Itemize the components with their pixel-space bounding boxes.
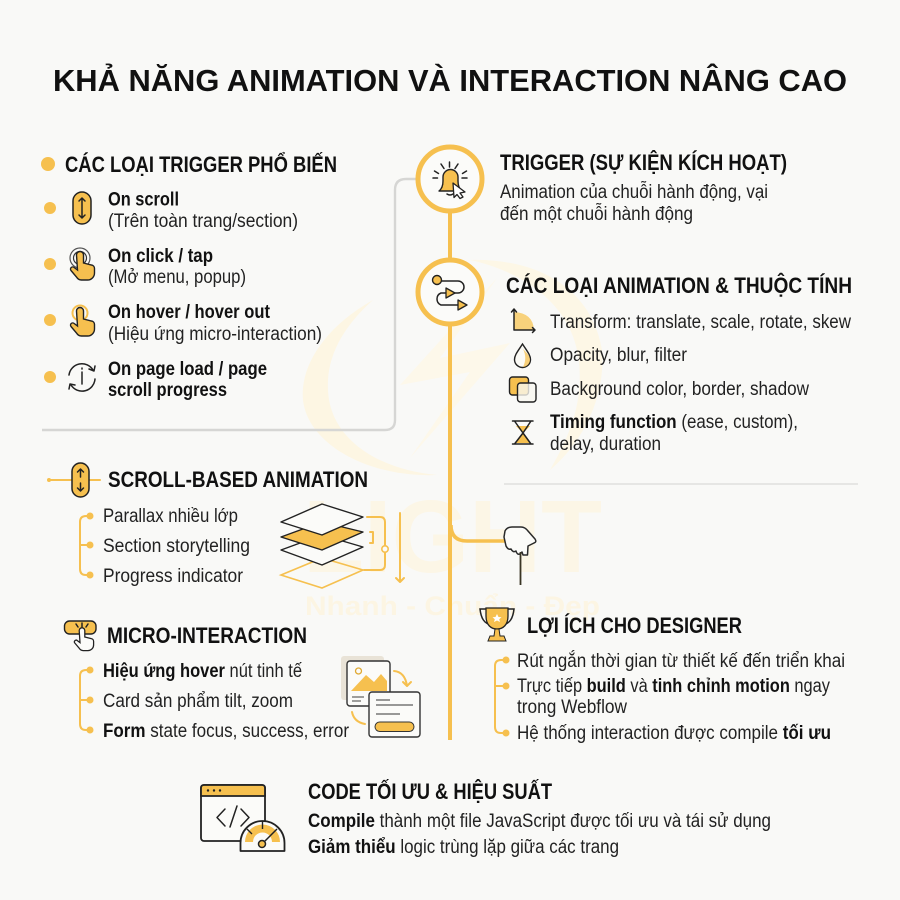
item: opacity: [514, 344, 688, 368]
icon: animation path: [418, 260, 482, 324]
panel: scroll-based animation: [47, 463, 404, 588]
heading: animation types: CÁC LOẠI ANIMATION & THUỘC TÍNH: [506, 273, 852, 298]
heading: benefits: LỢI ÍCH CHO DESIGNER: [527, 613, 742, 638]
list: benefits: Hệ thống interaction được compile tối ưu: [517, 723, 831, 744]
item: on scroll: On scroll: [108, 190, 179, 210]
item: on scroll: [44, 190, 298, 232]
watermark: LIGHT logo: Nhanh - Chuẩn - Đẹp: [305, 591, 600, 621]
item: on page load: On page load / page: [108, 359, 267, 380]
title: KHẢ NĂNG ANIMATION VÀ INTERACTION NÂNG CAO: [53, 62, 847, 98]
icon: pointing hand: [504, 527, 536, 585]
heading: trigger: TRIGGER (SỰ KIỆN KÍCH HOẠT): [500, 150, 787, 175]
heading: code optimization: CODE TỐI ƯU & HIỆU SUẤT: [308, 778, 552, 804]
text: reduce duplication: Giảm thiểu logic trùng lặp giữa các trang: [308, 837, 619, 858]
list: benefits: Trực tiếp build và tinh chỉnh motion ngay: [517, 676, 830, 697]
icon: code window with gauge: [201, 785, 284, 851]
panel: benefits for designers: [480, 608, 845, 744]
item: background: Background color, border, shadow: [550, 379, 809, 400]
item: on click: On click / tap: [108, 246, 213, 267]
divider: [504, 483, 858, 485]
list: micro-interaction items: [80, 661, 350, 742]
list: micro-interaction items: Form state focus, success, error: [103, 721, 350, 742]
icon: parallax layers: [281, 504, 404, 588]
list: scroll-based items: Progress indicator: [103, 566, 244, 587]
item: timing: [512, 412, 798, 455]
list: scroll-based items: Section storytelling: [103, 536, 250, 557]
text: compile: Compile thành một file JavaScript được tối ưu và tái sử dụng: [308, 811, 771, 832]
icon: bell with cursor: [418, 147, 482, 211]
item: on page load: [44, 359, 267, 401]
text: trigger description: Animation của chuỗi hành động, vại: [500, 181, 768, 203]
icon: cards: [341, 656, 420, 737]
panel: animation types and properties: [418, 260, 852, 455]
item: on click: (Mở menu, popup): [108, 267, 246, 288]
icon: scroll pill: [47, 463, 100, 497]
panel: trigger event: [418, 147, 787, 225]
item: transform: Transform: translate, scale, rotate, skew: [550, 312, 851, 333]
heading: micro-interaction: MICRO-INTERACTION: [107, 623, 307, 648]
item: on hover: On hover / hover out: [108, 302, 271, 323]
item: opacity: Opacity, blur, filter: [550, 345, 688, 366]
item: timing: delay, duration: [550, 434, 661, 455]
watermark: LIGHT logo: LIGHT: [303, 479, 602, 594]
text: trigger description: đến một chuỗi hành động: [500, 203, 693, 225]
item: on click: [44, 246, 246, 288]
item: timing: Timing function (ease, custom),: [550, 412, 798, 433]
heading: scroll-based: SCROLL-BASED ANIMATION: [108, 467, 368, 492]
list: benefits: Rút ngắn thời gian từ thiết kế đến triển khai: [517, 650, 845, 672]
connector: grey line from trigger panel to timeline: [42, 179, 418, 430]
icon: trophy: [480, 608, 514, 641]
list: benefits: [495, 650, 845, 744]
panel: micro-interaction: [64, 621, 420, 742]
list: benefits: trong Webflow: [517, 697, 627, 718]
item: background: [510, 377, 809, 402]
text: trigger description: [500, 181, 768, 225]
item: on scroll: (Trên toàn trang/section): [108, 211, 298, 232]
list: micro-interaction items: Hiệu ứng hover nút tinh tế: [103, 661, 302, 682]
item: on hover: [44, 302, 322, 345]
panel: code optimization: [201, 778, 771, 858]
item: on page load: scroll progress: [108, 380, 227, 401]
icon: button with hand: [64, 621, 96, 651]
list: micro-interaction items: Card sản phẩm tilt, zoom: [103, 691, 293, 712]
heading: common triggers: CÁC LOẠI TRIGGER PHỔ BIẾN: [65, 152, 337, 177]
watermark: LIGHT logo: [303, 260, 602, 621]
list: scroll-based items: Parallax nhiều lớp: [103, 506, 238, 527]
list: scroll-based items: [80, 506, 250, 587]
item: on hover: (Hiệu ứng micro-interaction): [108, 324, 322, 345]
panel: common triggers: [41, 152, 337, 401]
timeline: [450, 210, 505, 740]
